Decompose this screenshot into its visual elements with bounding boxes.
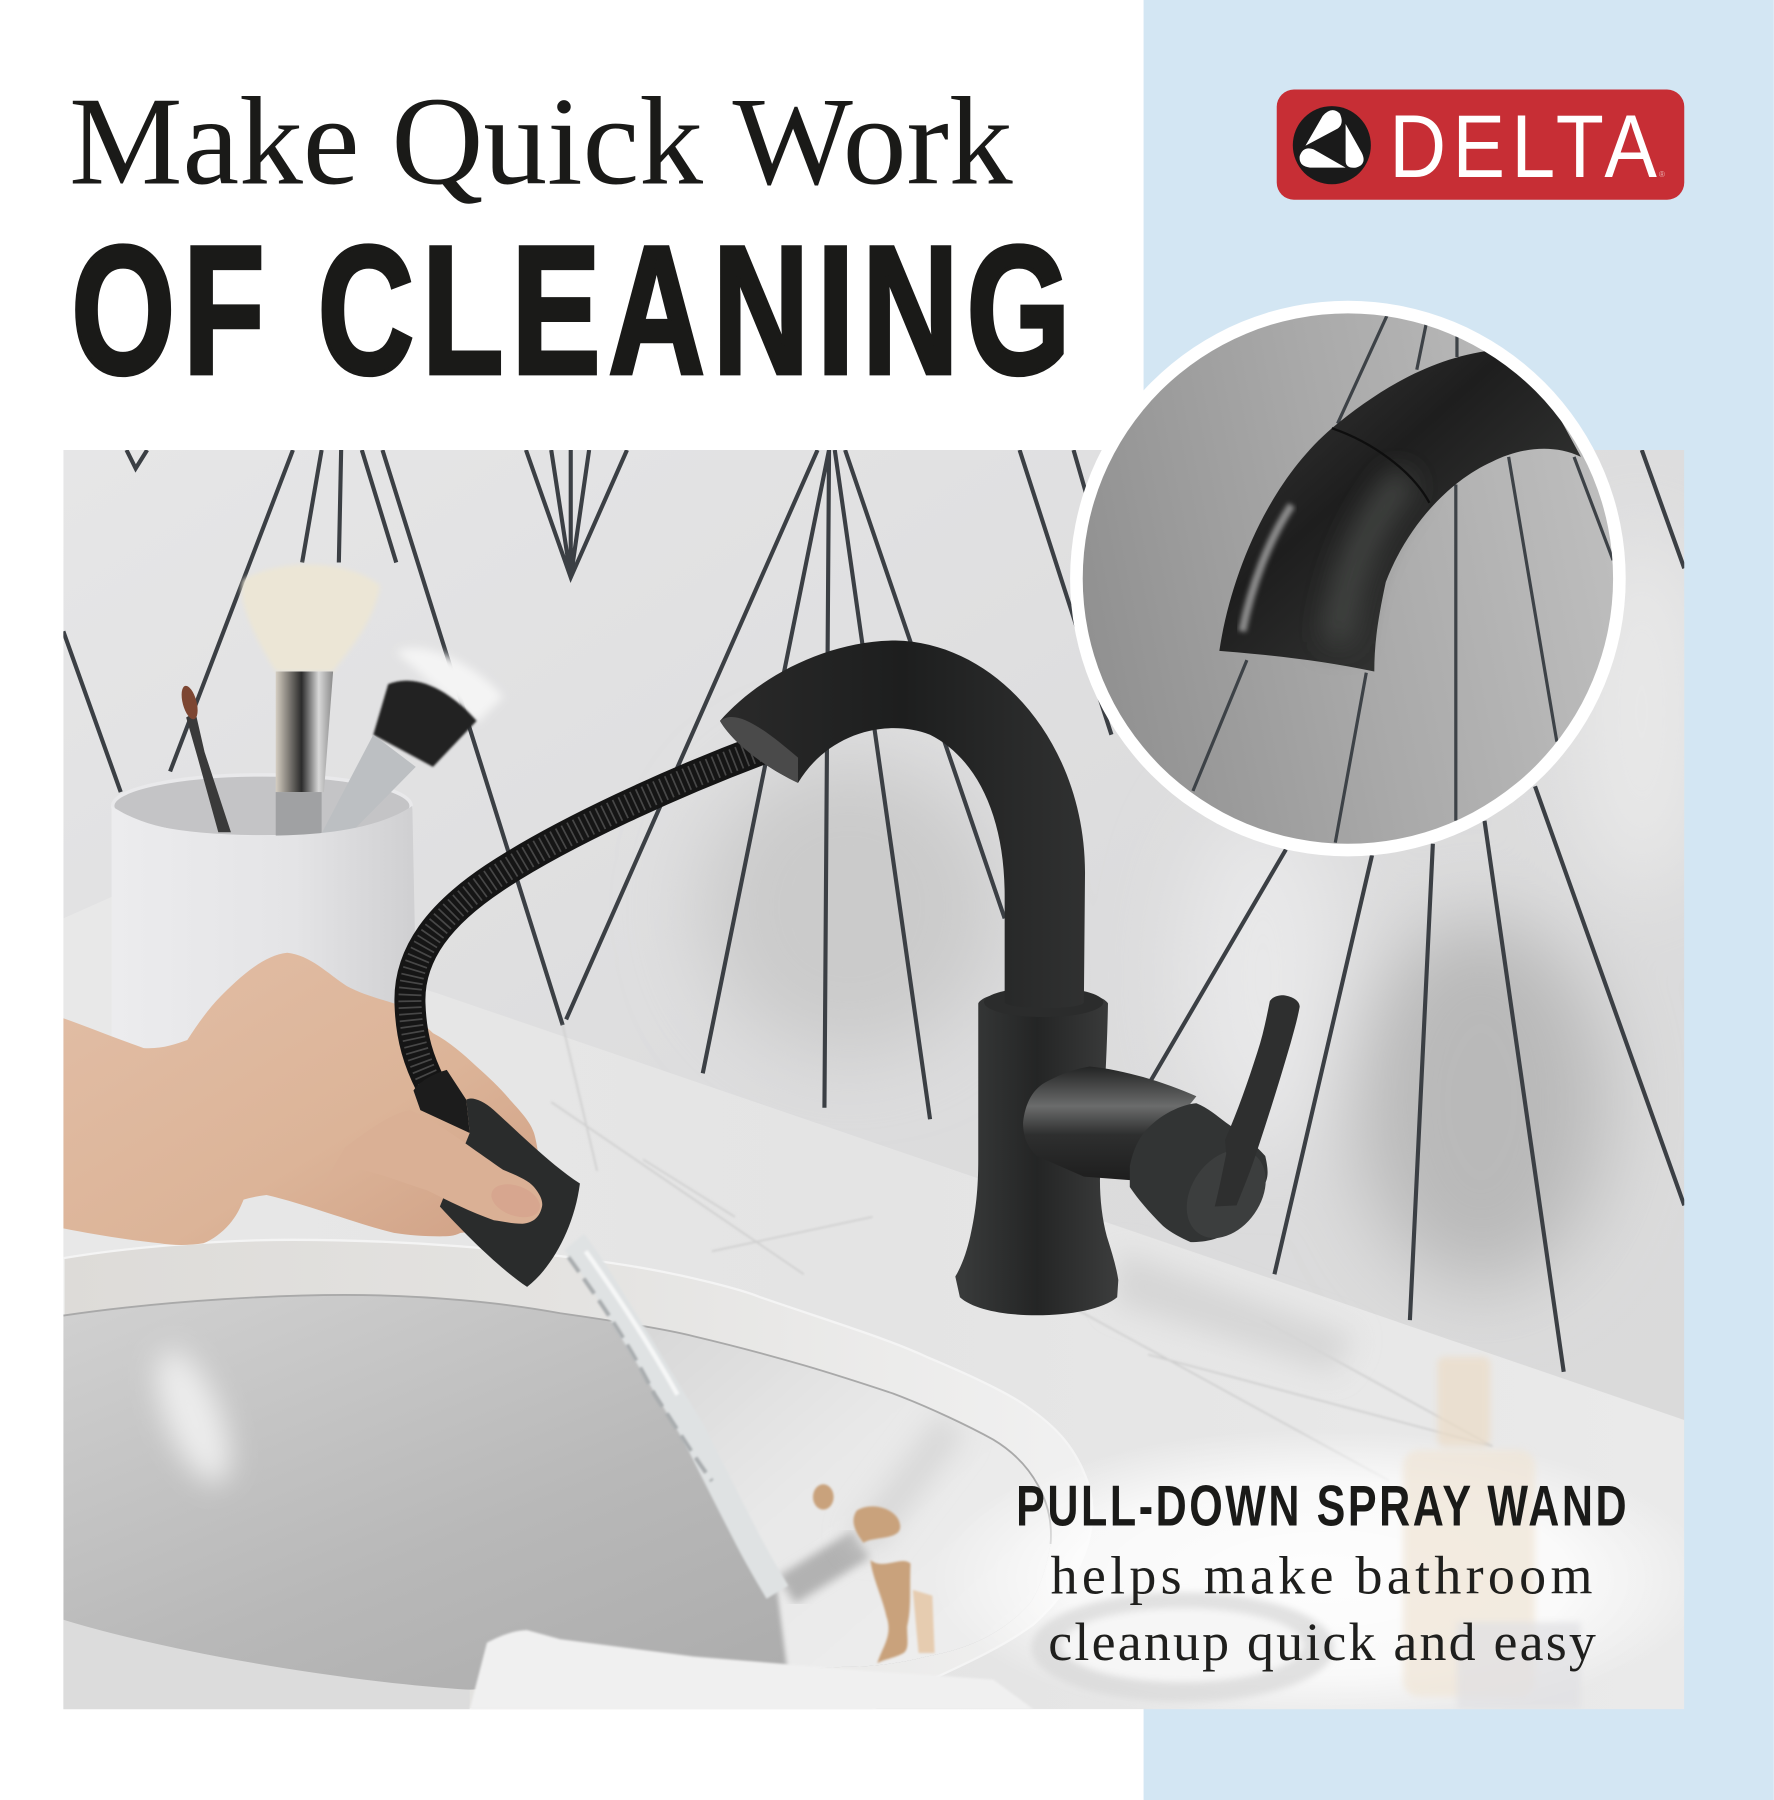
angled black brush [322, 648, 503, 833]
nozzle cone [440, 1098, 580, 1287]
towel [470, 1630, 1033, 1709]
wall [63, 450, 1684, 1483]
sink bowl [64, 1296, 1032, 1690]
collar [413, 1070, 470, 1133]
sink rim [63, 1240, 1092, 1709]
spray head [413, 1070, 580, 1287]
makeup brushes [179, 564, 503, 838]
main bathroom photo [63, 450, 1711, 1728]
wall shading [700, 528, 1711, 1286]
large cream brush [242, 564, 380, 838]
logo background [1277, 90, 1684, 200]
wall tile line pattern [63, 450, 1684, 1372]
drain reflection [787, 1544, 861, 1590]
bowl shaded side [64, 1296, 1030, 1690]
blurred nail polish bottle [1403, 1357, 1535, 1697]
marble counter [64, 1071, 1684, 1709]
barrel [1023, 1066, 1196, 1180]
Delta logo [1277, 90, 1684, 200]
blurred glass jar [1031, 1592, 1581, 1709]
lever [1215, 995, 1300, 1207]
bowl inner edge [63, 1295, 1051, 1544]
title line 1: Make Quick Work [69, 72, 1014, 212]
hub [1130, 1103, 1268, 1242]
faucet shadow on counter [1118, 1260, 1346, 1368]
title line 2: OF CLEANING [71, 207, 1070, 412]
faucet handle [1023, 995, 1300, 1253]
foundation stain [813, 1484, 935, 1663]
below-bowl counter [63, 1620, 470, 1709]
faucet spout [720, 641, 1085, 1008]
spout seam [1332, 428, 1429, 503]
bowl highlight [148, 1346, 240, 1490]
closeup spout [1219, 350, 1581, 672]
faucet base [955, 987, 1118, 1315]
brush cup front [112, 806, 417, 1050]
caption line 1: helps make bathroom [1051, 1545, 1592, 1605]
thumb nail [487, 1178, 544, 1223]
closeup image [1068, 298, 1630, 861]
bowl bright side [644, 1328, 1050, 1668]
hand back and fingers [63, 953, 542, 1245]
marble veins [551, 1025, 1493, 1481]
registered mark: ® [1659, 170, 1665, 179]
blue side panel [1144, 0, 1774, 1800]
brush cup back [113, 775, 411, 837]
thumb [322, 1110, 542, 1224]
caption [1016, 1474, 1627, 1672]
logo mark [1293, 106, 1371, 184]
title [69, 72, 1070, 412]
spout highlight [1242, 505, 1292, 631]
caption glow [930, 1429, 1711, 1728]
logo wordmark: DELTA [1389, 96, 1658, 196]
detail circle: spout closeup [1068, 298, 1630, 861]
caption heading: PULL-DOWN SPRAY WAND [1016, 1474, 1627, 1538]
hose [410, 748, 764, 1085]
spout soft band [1338, 476, 1406, 643]
hub face [1170, 1135, 1282, 1253]
water stream [568, 1242, 777, 1592]
small brush [186, 712, 231, 832]
closeup background [1068, 298, 1630, 861]
closeup lines [1193, 316, 1613, 843]
caption line 2: cleanup quick and easy [1048, 1612, 1596, 1672]
circle frame [1070, 301, 1626, 856]
